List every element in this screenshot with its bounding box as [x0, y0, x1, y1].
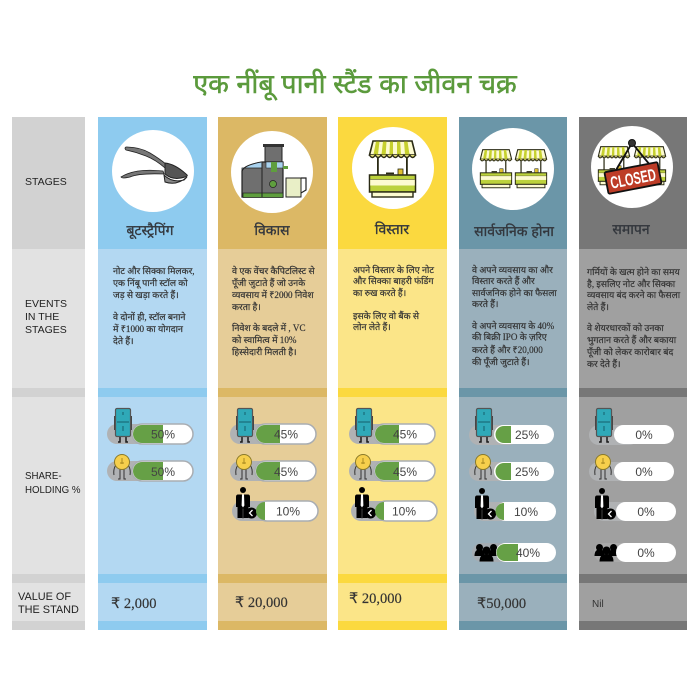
label: events in the stages: IN THE: [25, 311, 59, 323]
icon: lemon squeezer: [112, 130, 194, 212]
bar: note 45%: 45%: [274, 428, 298, 442]
text: events: लोन लेते हैं।: [353, 321, 391, 332]
text: events: पूँजी जुटाते हैं जो उनके: [232, 277, 306, 289]
bar: public 40%: 40%: [516, 546, 540, 560]
text: events: हिस्सेदारी मिलती है।: [232, 346, 297, 357]
text: events: है, इसलिए नोट और सिक्का: [587, 278, 676, 289]
bar: VC 10%: [232, 487, 318, 521]
text: events: वे दोनों ही, स्टॉल बनाने: [113, 311, 186, 322]
heading: विकास: [254, 222, 290, 238]
value: ₹50,000: [477, 596, 526, 612]
bar: coin 50%: 50%: [151, 465, 175, 479]
bar: coin 45%: 45%: [393, 465, 417, 479]
bar: public 0%: 0%: [637, 546, 655, 560]
text: events: और सिक्का बाहरी फंडिंग: [353, 275, 434, 286]
bar: note 25%: [469, 408, 554, 445]
text: events: निवेश के बदले में , VC: [232, 322, 306, 333]
sign: closed: CLOSED: [609, 165, 658, 193]
bar: public 40%: [472, 543, 556, 562]
text: events: गर्मियों के खत्म होने का समय: [587, 266, 680, 277]
text: events: अपने विस्तार के लिए नोट: [353, 264, 434, 275]
bar: coin 45%: [230, 454, 316, 481]
text: events: कर देते हैं।: [587, 358, 621, 369]
panel: closing: [579, 117, 687, 630]
bar: VC 0%: [594, 488, 676, 521]
text: events: का रुख करते हैं।: [353, 287, 406, 298]
text: events: पूँजी को लेकर कारोबार बंद: [587, 346, 673, 358]
bar: note 45%: 45%: [393, 428, 417, 442]
text: events: वे अपने व्यवसाय के 40%: [472, 320, 555, 331]
bar: coin 25%: 25%: [515, 465, 539, 479]
bar: coin 45%: 45%: [274, 465, 298, 479]
text: events: वे शेयरधारकों को उनका: [587, 322, 664, 333]
panel: going public: [459, 117, 567, 630]
panel: growth: [218, 117, 327, 630]
text: events: करते हैं।: [472, 298, 498, 309]
text: events: करते हैं और ₹20,000: [472, 344, 543, 355]
bar: bank 10%: [351, 487, 437, 521]
icon: closed sign over stalls: [591, 126, 673, 208]
bar: VC 10%: 10%: [276, 504, 300, 518]
heading: समापन: [612, 221, 650, 237]
bar: VC 10%: 10%: [514, 505, 538, 519]
icon: two stalls: [472, 128, 554, 210]
bar: note 45%: [230, 408, 316, 444]
text: events: देते हैं।: [113, 335, 134, 346]
text: events: वे एक वेंचर कैपिटलिस्ट से: [232, 265, 315, 276]
value: ₹ 2,000: [111, 596, 156, 612]
icon: juicer: [231, 131, 313, 213]
text: events: एक निंबू पानी स्टॉल को: [113, 277, 188, 289]
value: ₹ 20,000: [349, 591, 402, 607]
text: events: जड़ से खड़ा करते हैं।: [113, 289, 179, 300]
text: events: भुगतान करते हैं और बकाया: [587, 334, 677, 346]
bar: note 0%: [589, 408, 674, 445]
heading: विस्तार: [375, 221, 409, 237]
title: एक नींबू पानी स्टैंड का जीवन चक्र: [193, 68, 518, 101]
bar: coin 50%: [107, 454, 193, 481]
label: value of the stand: THE STAND: [18, 604, 79, 616]
bar: VC 10%: [474, 488, 556, 521]
value: ₹ 20,000: [235, 595, 288, 611]
text: events: सार्वजनिक होने का फैसला: [472, 287, 557, 298]
panel: row labels: [12, 117, 85, 630]
text: events: की बिक्री IPO के ज़रिए: [472, 331, 548, 342]
bar: coin 0%: [589, 454, 674, 481]
text: events: को स्वामित्व में 10%: [232, 334, 297, 345]
text: events: की पूँजी जुटाते हैं।: [472, 356, 530, 368]
panel: expansion: [338, 117, 447, 630]
bar: public 0%: [594, 543, 676, 562]
bar: note 25%: 25%: [515, 428, 539, 442]
label: shareholding: HOLDING %: [25, 485, 81, 496]
bar: note 0%: 0%: [635, 428, 653, 442]
label: events in the stages: STAGES: [25, 324, 67, 336]
label: stages: STAGES: [25, 176, 67, 188]
text: events: वे अपने व्यवसाय का और: [472, 264, 553, 275]
text: events: में ₹1000 का योगदान: [113, 323, 184, 334]
bar: coin 0%: 0%: [635, 465, 653, 479]
label: events in the stages: EVENTS: [25, 298, 67, 310]
bar: note 50%: 50%: [151, 428, 175, 442]
heading: बूटस्ट्रैपिंग: [126, 222, 175, 239]
text: events: व्यवसाय बंद करने का फैसला: [587, 289, 681, 300]
bar: coin 25%: [469, 454, 554, 481]
label: value of the stand: VALUE OF: [18, 591, 71, 603]
label: shareholding: SHARE-: [25, 471, 62, 482]
text: events: विस्तार करते हैं और: [472, 275, 535, 286]
bar: note 50%: [107, 408, 193, 444]
text: events: लेते हैं।: [587, 301, 609, 312]
text: events: इसके लिए वो बैंक से: [353, 310, 420, 321]
text: events: नोट और सिक्का मिलकर,: [113, 265, 195, 276]
value: Nil: [592, 599, 604, 610]
text: events: व्यवसाय में ₹2000 निवेश: [232, 289, 314, 300]
icon: stall: [352, 127, 434, 209]
panel: bootstrapping: [98, 117, 207, 630]
bar: VC 0%: 0%: [637, 505, 655, 519]
bar: bank 10%: 10%: [392, 504, 416, 518]
text: events: करता है।: [232, 301, 261, 312]
heading: सार्वजनिक होना: [474, 223, 554, 239]
bar: coin 45%: [349, 454, 435, 481]
bar: note 45%: [349, 408, 435, 444]
